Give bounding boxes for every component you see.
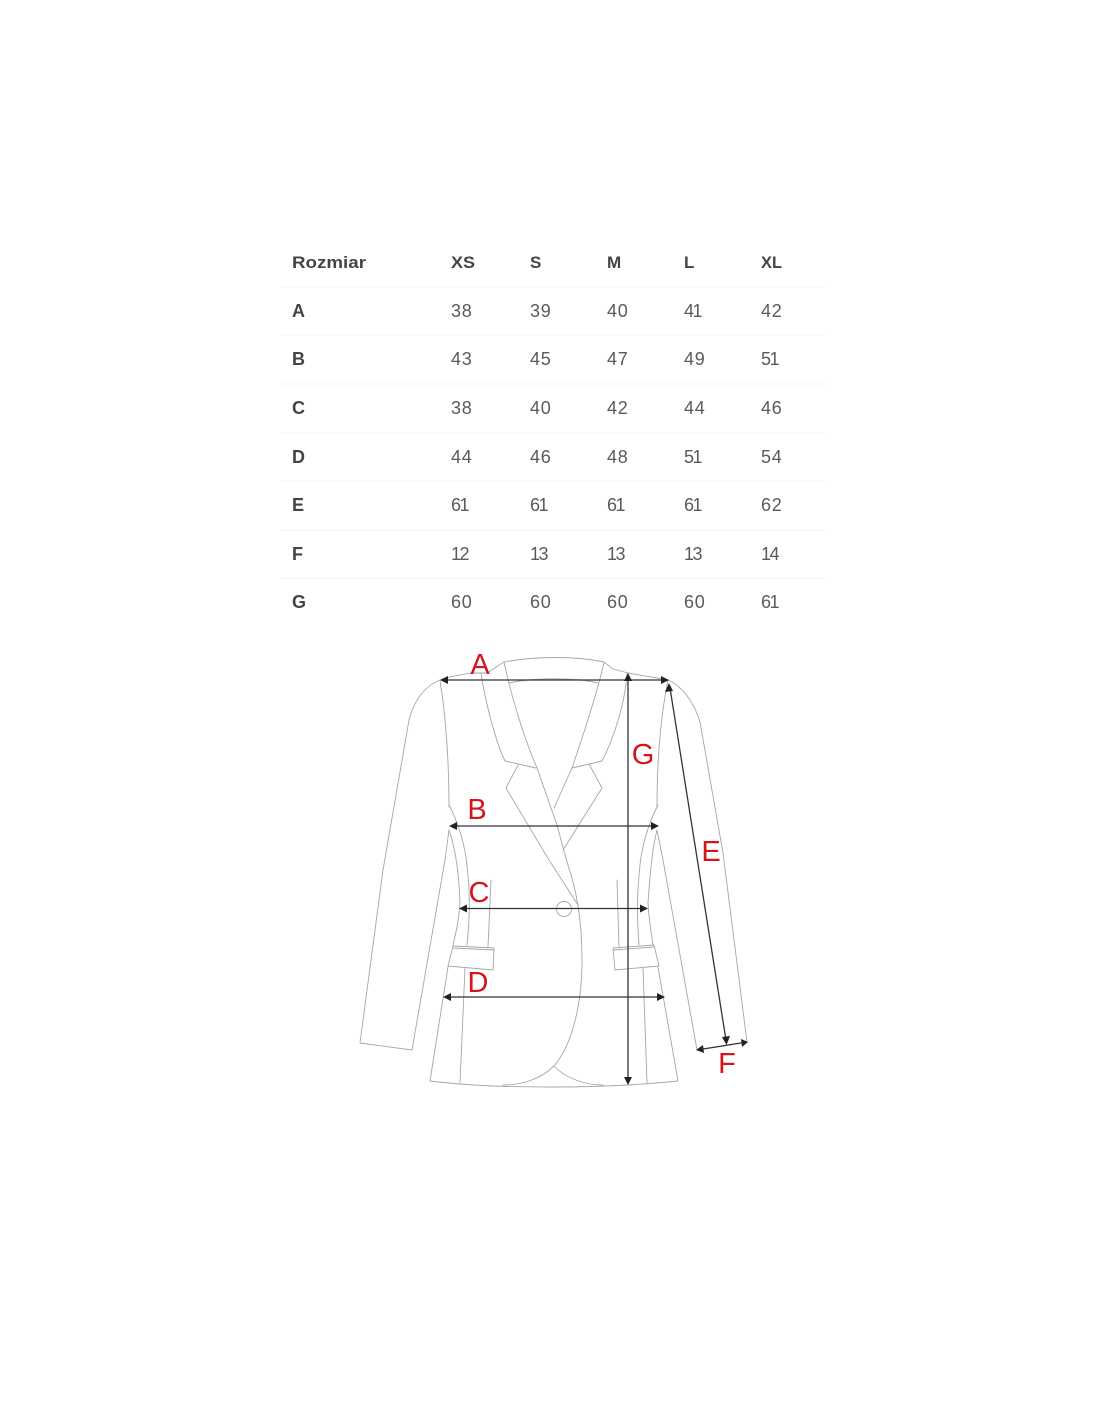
- front edge: [503, 862, 582, 1085]
- row G: 60: [451, 592, 472, 612]
- button: [556, 902, 572, 916]
- row E: 61: [451, 495, 470, 515]
- row A: 41: [684, 301, 703, 321]
- row E: 61: [684, 495, 703, 515]
- label A: A: [470, 649, 490, 681]
- row F: 14: [761, 544, 780, 564]
- hem: [430, 1081, 678, 1087]
- measurement arrow F: [696, 1039, 748, 1053]
- table header row: Rozmiar: [292, 253, 366, 272]
- row D: 51: [684, 447, 703, 467]
- row E: [292, 495, 782, 515]
- measurement arrow B: [449, 822, 659, 830]
- row A: 38: [451, 301, 472, 321]
- row A: A: [292, 301, 305, 321]
- measurement arrow G: [624, 673, 632, 1085]
- row G: 60: [530, 592, 551, 612]
- row B: 45: [530, 349, 551, 369]
- left pocket: [448, 946, 494, 970]
- row F: 13: [684, 544, 703, 564]
- row A: 40: [607, 301, 628, 321]
- label E: E: [701, 836, 721, 868]
- row A: 39: [530, 301, 551, 321]
- row C: [292, 398, 782, 418]
- right pocket: [613, 945, 659, 970]
- row B: 43: [451, 349, 472, 369]
- princess seams: [449, 805, 469, 945]
- row B: [292, 349, 780, 369]
- row A: [292, 301, 782, 321]
- label B: B: [467, 794, 487, 826]
- size table: [280, 253, 825, 612]
- row C: 40: [530, 398, 551, 418]
- row E: 62: [761, 495, 782, 515]
- row C: 42: [607, 398, 628, 418]
- row G: 60: [607, 592, 628, 612]
- row G: G: [292, 592, 306, 612]
- row A: 42: [761, 301, 782, 321]
- label F: F: [718, 1048, 736, 1080]
- row F: [292, 544, 780, 564]
- row C: C: [292, 398, 305, 418]
- label C: C: [469, 877, 489, 909]
- row F: F: [292, 544, 303, 564]
- table header row: M: [607, 253, 621, 272]
- row B: 47: [607, 349, 628, 369]
- table header row: XS: [451, 253, 475, 272]
- armhole seams: [440, 680, 449, 807]
- row D: 54: [761, 447, 782, 467]
- row E: 61: [607, 495, 626, 515]
- row F: 13: [607, 544, 626, 564]
- measurement arrow E: [665, 683, 730, 1045]
- table header row: S: [530, 253, 541, 272]
- row F: 12: [451, 544, 470, 564]
- row B: B: [292, 349, 305, 369]
- table header row: XL: [761, 253, 782, 272]
- shoulders and collar: [440, 658, 668, 680]
- row D: 46: [530, 447, 551, 467]
- row D: [292, 447, 782, 467]
- measurement arrow A: [440, 676, 669, 684]
- row D: 44: [451, 447, 472, 467]
- row D: D: [292, 447, 305, 467]
- row B: 51: [761, 349, 780, 369]
- lapels: [481, 673, 536, 768]
- row C: 46: [761, 398, 782, 418]
- row F: 13: [530, 544, 549, 564]
- label G: G: [632, 739, 654, 771]
- left sleeve: [360, 680, 449, 1050]
- row G: [292, 592, 780, 612]
- row G: 60: [684, 592, 705, 612]
- measurement arrow C: [459, 904, 648, 912]
- table header row: [292, 253, 782, 272]
- label D: D: [468, 967, 488, 999]
- row D: 48: [607, 447, 628, 467]
- row B: 49: [684, 349, 705, 369]
- side seams and darts: [430, 967, 448, 1081]
- jacket outline drawing: [360, 658, 747, 1087]
- row G: 61: [761, 592, 780, 612]
- right sleeve: [657, 680, 747, 1050]
- row C: 44: [684, 398, 705, 418]
- measurement arrow D: [443, 993, 665, 1001]
- table header row: L: [684, 253, 694, 272]
- row E: 61: [530, 495, 549, 515]
- row E: E: [292, 495, 304, 515]
- row C: 38: [451, 398, 472, 418]
